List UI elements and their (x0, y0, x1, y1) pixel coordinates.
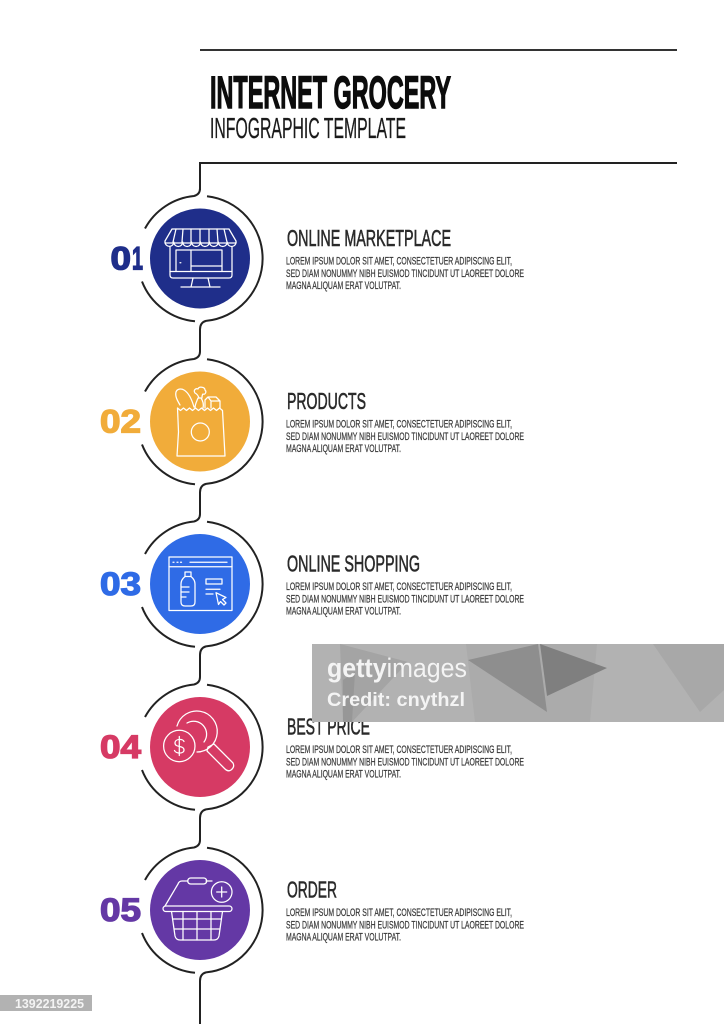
body text 4: LOREM IPSUM DOLOR SIT AMET, CONSECTETUER ADIPISCING ELIT, (286, 744, 512, 756)
icon: shopping basket with plus (163, 878, 232, 940)
body text 1: LOREM IPSUM DOLOR SIT AMET, CONSECTETUER ADIPISCING ELIT, (286, 256, 512, 268)
body text 4: SED DIAM NONUMMY NIBH EUISMOD TINCIDUNT UT LAOREET DOLORE (286, 756, 524, 768)
heading 4: BEST PRICE (287, 714, 370, 740)
body text 2: LOREM IPSUM DOLOR SIT AMET, CONSECTETUER ADIPISCING ELIT, (286, 418, 512, 430)
icon: online store monitor (165, 229, 236, 287)
step 2: products (100, 352, 524, 514)
ring and connector 4 (142, 677, 263, 840)
timeline start connector (200, 163, 677, 190)
title: INTERNET GROCERY (210, 67, 451, 118)
number 01: 0 (110, 240, 131, 276)
ring and connector 5 (142, 840, 263, 1024)
body text 5: LOREM IPSUM DOLOR SIT AMET, CONSECTETUER ADIPISCING ELIT, (286, 907, 512, 919)
heading 2: PRODUCTS (287, 388, 366, 414)
number 03: 03 (100, 566, 141, 602)
ring and connector 2 (142, 352, 263, 514)
number 01: 1 (132, 240, 143, 276)
ring and connector 3 (142, 514, 263, 677)
circle 4 (150, 697, 250, 797)
title (210, 67, 451, 145)
body text 4: MAGNA ALIQUAM ERAT VOLUTPAT. (286, 768, 401, 780)
body text 3 (286, 581, 524, 618)
ring and connector 1 (142, 188, 263, 352)
number 01 (110, 240, 143, 276)
body text 2: SED DIAM NONUMMY NIBH EUISMOD TINCIDUNT UT LAOREET DOLORE (286, 431, 524, 443)
title: INFOGRAPHIC TEMPLATE (210, 113, 406, 145)
body text 1 (286, 256, 524, 292)
body text 5 (286, 907, 524, 944)
number 02: 02 (100, 404, 141, 440)
image id badge: 1392219225 (15, 996, 84, 1011)
step 1: online marketplace (110, 188, 524, 352)
body text 5: MAGNA ALIQUAM ERAT VOLUTPAT. (286, 932, 401, 944)
body text 4 (286, 744, 524, 780)
heading 3: ONLINE SHOPPING (287, 550, 420, 576)
circle 5 (150, 860, 250, 960)
body text 2 (286, 418, 524, 455)
step 3: online shopping (100, 514, 524, 677)
body text 5: SED DIAM NONUMMY NIBH EUISMOD TINCIDUNT UT LAOREET DOLORE (286, 920, 524, 932)
icon: grocery bag (176, 387, 225, 456)
body text 1: MAGNA ALIQUAM ERAT VOLUTPAT. (286, 280, 401, 292)
body text 3: MAGNA ALIQUAM ERAT VOLUTPAT. (286, 606, 401, 618)
step 4: best price (100, 677, 524, 840)
circle 2 (150, 372, 250, 472)
circle 1 (150, 208, 250, 308)
heading 5: ORDER (287, 876, 337, 902)
body text 2: MAGNA ALIQUAM ERAT VOLUTPAT. (286, 443, 401, 455)
icon: magnifier with dollar coin (164, 711, 234, 771)
heading 1: ONLINE MARKETPLACE (287, 225, 451, 251)
circle 3 (150, 534, 250, 634)
watermark logo text: gettyimages (327, 653, 467, 683)
body text 1: SED DIAM NONUMMY NIBH EUISMOD TINCIDUNT UT LAOREET DOLORE (286, 268, 524, 280)
body text 3: SED DIAM NONUMMY NIBH EUISMOD TINCIDUNT UT LAOREET DOLORE (286, 594, 524, 606)
body text 3: LOREM IPSUM DOLOR SIT AMET, CONSECTETUER ADIPISCING ELIT, (286, 581, 512, 593)
top rule (200, 49, 677, 51)
number 05: 05 (100, 892, 141, 928)
step 5: order (100, 840, 524, 1024)
watermark banner (312, 644, 724, 722)
watermark credit text: Credit: cnythzl (327, 690, 465, 711)
icon: browser window with bottle (169, 557, 232, 610)
number 04: 04 (100, 729, 141, 765)
